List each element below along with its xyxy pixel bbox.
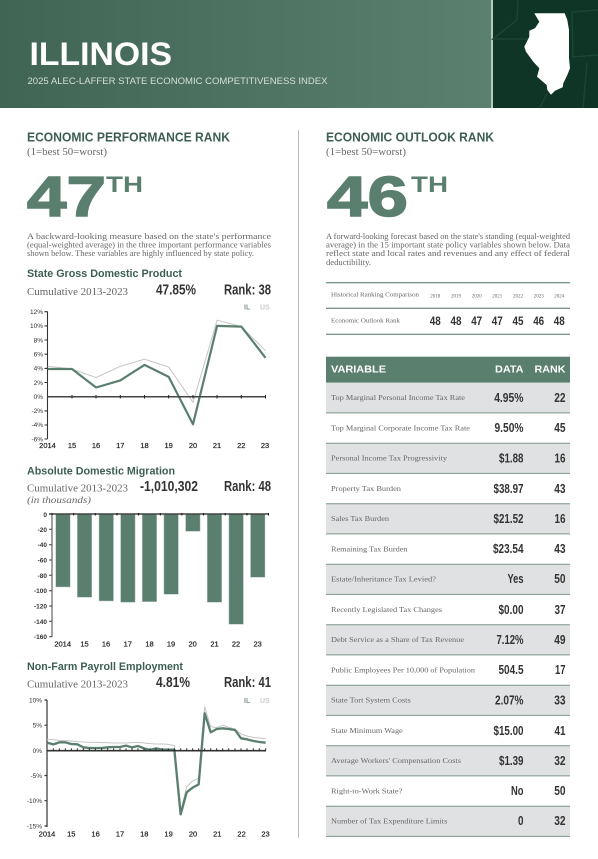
performance description: A backward-looking measure based on the state's performance — [27, 232, 271, 241]
row: workers compensation — [331, 754, 566, 768]
bar chart: migration: -80 — [38, 573, 47, 580]
row: estate/inheritance tax levied — [331, 572, 566, 586]
heading: payroll employment: Non-Farm Payroll Employment — [27, 661, 183, 673]
panel: domestic migration — [27, 466, 271, 648]
panel: economic outlook — [326, 130, 571, 267]
title: ILLINOIS — [30, 36, 172, 72]
row: personal income tax progressivity: $1.88 — [499, 452, 524, 466]
line chart: GDP: 23 — [261, 441, 269, 450]
row: top marginal personal income tax rate: Top Marginal Personal Income Tax Rate — [331, 393, 466, 402]
line chart: employment: -5% — [30, 773, 42, 780]
row: state minimum wage: State Minimum Wage — [331, 726, 403, 735]
row: tax expenditure limits: 0 — [518, 814, 524, 828]
row: sales tax burden: Sales Tax Burden — [331, 514, 389, 523]
row: public employees — [331, 663, 566, 677]
heading: domestic migration: Absolute Domestic Migration — [27, 466, 175, 478]
row: top marginal corporate income tax rate — [331, 421, 566, 435]
panel: payroll employment — [27, 661, 271, 838]
historical ranking table: 48 — [554, 314, 565, 328]
legend: employment: US — [260, 698, 270, 705]
bar chart: migration — [34, 512, 269, 648]
line chart: employment: 22 — [237, 829, 246, 838]
line chart: GDP: -2% — [31, 408, 43, 415]
line chart: GDP: 8% — [34, 338, 43, 344]
migration summary: Rank: 48 — [224, 479, 271, 495]
line chart: GDP: 2014 — [39, 441, 56, 450]
bar chart: migration: 21 — [210, 639, 219, 648]
line chart: employment: 16 — [91, 829, 100, 838]
bar chart: migration: 17 — [124, 639, 132, 648]
bar chart: migration: 2014 — [54, 639, 71, 648]
historical ranking table: 2023 — [534, 294, 544, 299]
migration summary: Cumulative 2013-2023 — [27, 484, 128, 495]
legend: GDP — [244, 304, 270, 312]
row: right-to-work: Right-to-Work State? — [331, 786, 402, 796]
row: public employees: 504.5 — [498, 663, 524, 677]
line chart: GDP: 2% — [34, 380, 43, 387]
employment summary — [27, 675, 271, 691]
row: personal income tax progressivity: 16 — [554, 452, 566, 466]
bar chart: migration: 15 — [80, 639, 89, 648]
line chart: employment: 18 — [140, 829, 148, 838]
line chart: GDP: 6% — [34, 352, 43, 358]
row: state minimum wage — [331, 724, 566, 738]
line chart: GDP: 17 — [116, 441, 124, 450]
migration summary: -1,010,302 — [140, 479, 198, 495]
line chart: employment: 10% — [29, 698, 42, 704]
bar chart: migration: 16 — [102, 639, 110, 648]
bar chart: migration: -100 — [34, 588, 47, 595]
row: sales tax burden: 16 — [554, 512, 566, 526]
line chart: GDP: 18 — [140, 441, 149, 450]
table header: DATA — [495, 364, 524, 376]
historical ranking table: 47 — [471, 314, 482, 328]
heading: economic outlook rank: ECONOMIC OUTLOOK RANK — [326, 130, 494, 144]
historical ranking table: 47 — [492, 314, 503, 328]
GDP summary: Cumulative 2013-2023 — [27, 287, 128, 298]
row: top marginal personal income tax rate: 4.95% — [494, 391, 524, 405]
line chart: GDP: 4% — [34, 366, 43, 372]
row: estate/inheritance tax levied: Estate/Inheritance Tax Levied? — [331, 574, 436, 584]
subtitle: 2025 ALEC-LAFFER STATE ECONOMIC COMPETITIVENESS INDEX — [28, 76, 328, 87]
historical ranking table: 46 — [533, 314, 544, 328]
line chart: employment: 19 — [164, 829, 173, 838]
line chart: GDP: 21 — [213, 441, 221, 450]
row: personal income tax progressivity — [331, 452, 566, 466]
row: sales tax burden — [331, 512, 566, 526]
historical ranking table: 2021 — [492, 294, 503, 299]
legend: GDP: US — [260, 304, 270, 312]
outlook scale note: (1=best 50=worst) — [326, 147, 406, 158]
bar chart: migration: -140 — [34, 619, 47, 626]
line chart: employment: 5% — [33, 722, 42, 730]
row: recently legislated tax changes — [331, 603, 566, 617]
row: debt service: 49 — [554, 633, 566, 647]
performance rank number: TH — [106, 172, 143, 197]
line chart: GDP: -6% — [31, 436, 43, 444]
GDP summary: 47.85% — [156, 282, 196, 298]
line chart: GDP: 10% — [30, 323, 43, 330]
historical ranking table: 48 — [450, 314, 462, 328]
row: state minimum wage: 41 — [554, 724, 566, 738]
line chart: GDP — [30, 309, 269, 450]
bar chart: migration: 20 — [189, 639, 197, 648]
bar chart: migration: -160 — [34, 634, 47, 641]
GDP summary — [27, 282, 271, 298]
row: remaining tax burden: Remaining Tax Burden — [331, 544, 408, 554]
legend: employment — [244, 698, 270, 705]
row: remaining tax burden: $23.54 — [493, 542, 524, 556]
row: state tort system costs: 33 — [554, 694, 566, 708]
row: right-to-work: No — [511, 784, 524, 798]
line chart: GDP: 12% — [30, 309, 43, 316]
legend: employment: IL — [244, 698, 251, 705]
line chart: employment: 23 — [261, 829, 270, 838]
outlook description: deductibility. — [326, 258, 371, 267]
outlook rank number: TH — [411, 172, 448, 197]
row: debt service — [331, 633, 566, 647]
performance description: (equal-weighted average) in the three important performance variables — [27, 240, 271, 250]
row: top marginal personal income tax rate: 22 — [554, 391, 566, 405]
outlook rank number: 46 — [327, 165, 408, 229]
panel: economic performance — [27, 130, 271, 258]
historical ranking table: 45 — [512, 314, 524, 328]
row: property tax burden — [331, 482, 566, 496]
migration summary — [27, 479, 271, 506]
row: state tort system costs — [331, 694, 566, 708]
header banner — [0, 0, 493, 108]
row: property tax burden: 43 — [554, 482, 566, 496]
row: remaining tax burden: 43 — [554, 542, 566, 556]
performance rank number — [27, 165, 143, 229]
line chart: employment: 21 — [213, 829, 221, 838]
line chart: employment: 17 — [116, 829, 124, 838]
historical ranking table: 2020 — [472, 294, 482, 299]
historical ranking table: 2019 — [451, 294, 462, 299]
panel: state GDP — [27, 268, 271, 450]
row: property tax burden: Property Tax Burden — [331, 484, 401, 493]
line chart: employment: -15% — [27, 824, 42, 830]
outlook description: A forward-looking forecast based on the state's standing (equal-weighted — [326, 232, 570, 241]
line chart: GDP: 0% — [34, 394, 43, 401]
rank scale note: (1=best 50=worst) — [27, 147, 107, 158]
line chart: GDP: 16 — [92, 441, 100, 450]
historical ranking table: 2022 — [513, 294, 524, 299]
row: public employees: Public Employees Per 10,000 of Population — [331, 666, 475, 674]
row: state tort system costs: 2.07% — [495, 694, 524, 708]
heading: economic performance rank: ECONOMIC PERFORMANCE RANK — [27, 130, 230, 144]
bar chart: migration: 19 — [167, 639, 175, 648]
line chart: employment: 2014 — [39, 829, 55, 838]
row: sales tax burden: $21.52 — [494, 512, 524, 526]
row: workers compensation: $1.39 — [499, 754, 524, 768]
row: right-to-work: 50 — [554, 784, 566, 798]
GDP summary: Rank: 38 — [224, 282, 271, 298]
legend: GDP: IL — [244, 304, 251, 312]
row: top marginal corporate income tax rate: 45 — [554, 421, 566, 435]
line chart: employment: -10% — [27, 798, 42, 805]
row: estate/inheritance tax levied: Yes — [508, 572, 524, 586]
historical ranking table: Historical Ranking Comparison — [331, 293, 419, 299]
outlook rank number — [327, 165, 448, 229]
row: debt service: Debt Service as a Share of Tax Revenue — [331, 635, 465, 644]
line chart: GDP: 15 — [68, 441, 76, 450]
row: top marginal corporate income tax rate: 9.50% — [494, 421, 524, 435]
historical ranking table: Economic Outlook Rank — [331, 318, 400, 324]
variables table — [326, 357, 570, 836]
bar chart: migration: 23 — [254, 639, 262, 648]
row: public employees: 17 — [555, 663, 566, 677]
bar chart: migration: -40 — [38, 542, 47, 549]
row: state tort system costs: State Tort System Costs — [331, 696, 411, 704]
heading: state GDP: State Gross Domestic Product — [27, 268, 182, 280]
performance description — [27, 232, 271, 258]
historical ranking table: 2018 — [430, 294, 441, 299]
bar chart: migration: -120 — [34, 604, 47, 610]
historical ranking table — [326, 283, 570, 334]
line chart: GDP: -4% — [31, 422, 43, 429]
employment summary: Cumulative 2013-2023 — [27, 680, 128, 691]
bar chart: migration: -60 — [38, 558, 47, 564]
historical ranking table: 48 — [430, 314, 441, 328]
icon: Illinois state map — [493, 0, 598, 108]
employment summary: Rank: 41 — [224, 675, 271, 691]
bar chart: migration: 22 — [232, 639, 240, 648]
line chart: employment: 20 — [189, 829, 197, 838]
historical ranking table: 2024 — [554, 294, 565, 299]
row: top marginal personal income tax rate — [331, 391, 566, 405]
table header: VARIABLE — [331, 364, 386, 376]
line chart: employment: 0% — [33, 748, 42, 755]
vertical divider — [298, 130, 299, 838]
row: recently legislated tax changes: $0.00 — [498, 603, 524, 617]
line chart: GDP: 19 — [165, 441, 173, 450]
row: tax expenditure limits: 32 — [554, 814, 566, 828]
line chart: GDP: 20 — [189, 441, 197, 450]
row: estate/inheritance tax levied: 50 — [554, 572, 566, 586]
performance rank number: 47 — [27, 165, 106, 229]
row: recently legislated tax changes: 37 — [554, 603, 566, 617]
row: tax expenditure limits: Number of Tax Expenditure Limits — [331, 816, 447, 826]
row: tax expenditure limits — [331, 814, 566, 828]
migration summary: (in thousands) — [27, 495, 91, 506]
row: recently legislated tax changes: Recently Legislated Tax Changes — [331, 605, 442, 614]
outlook description: average) in the 15 important state policy variables shown below. Data — [326, 240, 570, 250]
row: workers compensation: 32 — [554, 754, 566, 768]
bar chart: migration: 0 — [43, 512, 47, 519]
row: remaining tax burden — [331, 542, 566, 556]
line chart: employment — [27, 698, 270, 838]
row: debt service: 7.12% — [496, 633, 524, 647]
row: personal income tax progressivity: Personal Income Tax Progressivity — [331, 454, 447, 462]
row: property tax burden: $38.97 — [494, 482, 524, 496]
performance description: shown below. These variables are highly influenced by state policy. — [27, 249, 254, 258]
row: state minimum wage: $15.00 — [494, 724, 524, 738]
outlook description: reflect state and local rates and revenues and any effect of federal — [326, 249, 571, 258]
outlook description — [326, 232, 571, 267]
row: top marginal corporate income tax rate: Top Marginal Corporate Income Tax Rate — [331, 424, 471, 432]
employment summary: 4.81% — [156, 675, 190, 691]
row: workers compensation: Average Workers' Compensation Costs — [331, 756, 461, 765]
row shading — [326, 383, 570, 836]
line chart: GDP: 22 — [237, 441, 245, 450]
line chart: employment: 15 — [67, 829, 75, 838]
bar chart: migration: 18 — [145, 639, 154, 648]
bar chart: migration: -20 — [38, 527, 47, 534]
table header — [326, 357, 570, 383]
table header: RANK — [534, 364, 566, 376]
row: right-to-work — [331, 784, 566, 798]
